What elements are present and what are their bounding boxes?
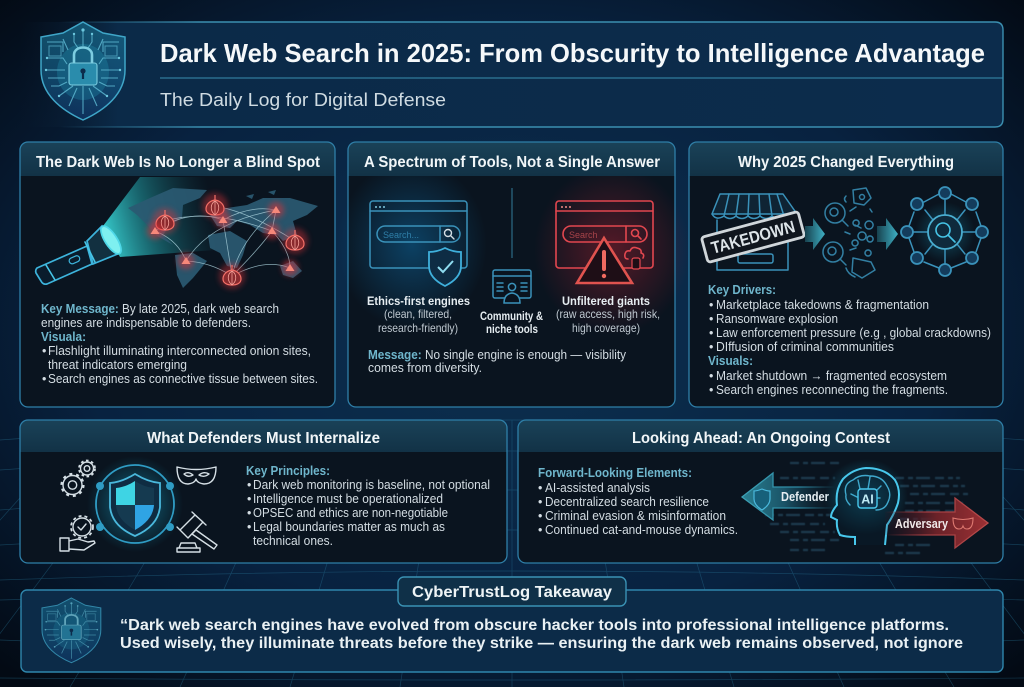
icon: hand with badge xyxy=(60,516,95,551)
heading: A Spectrum of Tools, Not a Single Answer xyxy=(364,154,660,171)
message text xyxy=(368,348,627,375)
icon: AI head xyxy=(824,459,908,545)
text: key message and visuals: Flashlight illuminating interconnected onion sites, xyxy=(48,344,311,358)
text: key drivers and visuals: • xyxy=(709,298,713,312)
heading: Why 2025 Changed Everything xyxy=(738,154,954,171)
text: key drivers and visuals xyxy=(708,283,991,397)
arrow: fragments to network xyxy=(877,218,898,250)
icon: ethics-first browser with shield xyxy=(370,201,467,286)
panel: Why 2025 Changed Everything xyxy=(689,142,1003,407)
text: key principles: • xyxy=(247,520,251,534)
text: forward-looking elements: Decentralized search resilience xyxy=(545,495,709,509)
decorative code rows xyxy=(765,463,968,553)
label: defender: Defender xyxy=(781,489,829,504)
icon: flashlight xyxy=(36,223,125,284)
panel: A Spectrum of Tools, Not a Single Answer xyxy=(337,142,690,407)
panel: What Defenders Must Internalize xyxy=(20,420,507,563)
text: key drivers and visuals: Search engines reconnecting the fragments. xyxy=(716,383,948,397)
icon: gears xyxy=(62,460,95,496)
panel: Looking Ahead: An Ongoing Contest xyxy=(518,420,1003,563)
icon: central split shield xyxy=(87,456,183,552)
heading: Looking Ahead: An Ongoing Contest xyxy=(632,430,891,447)
text: key message and visuals: Key Message: By late 2025, dark web search xyxy=(41,302,279,316)
icon: header shield with padlock xyxy=(41,22,125,120)
text: key drivers and visuals: • xyxy=(709,326,713,340)
text: forward-looking elements: • xyxy=(538,509,542,523)
text: key principles: Key Principles: xyxy=(246,464,330,478)
text: key drivers and visuals: DIffusion of criminal communities xyxy=(716,340,894,354)
text: key drivers and visuals: Visuals: xyxy=(708,354,753,368)
text: key principles xyxy=(246,464,490,548)
label: AI: AI xyxy=(861,492,874,506)
arrow: defender xyxy=(742,473,838,520)
text: key message and visuals: • xyxy=(42,372,46,386)
text: forward-looking elements: Criminal evasion & misinformation xyxy=(545,509,726,523)
text: forward-looking elements: • xyxy=(538,481,542,495)
text: forward-looking elements: AI-assisted analysis xyxy=(545,481,650,495)
icon: unfiltered browser with warning: Search xyxy=(569,230,598,240)
text: forward-looking elements: Forward-Looking Elements: xyxy=(538,466,692,480)
text: key principles: OPSEC and ethics are non-negotiable xyxy=(253,506,448,520)
quote: Used wisely, they illuminate threats before they strike — ensuring the dark web remains observed, not ignore xyxy=(120,635,963,652)
label: ethics-first engines xyxy=(367,294,470,335)
text: key drivers and visuals: • xyxy=(709,383,713,397)
text: key drivers and visuals: Law enforcement pressure (e.g , global crackdowns) xyxy=(716,326,991,340)
label: community and niche tools: Community & xyxy=(480,309,543,323)
icon: small shield xyxy=(754,489,770,510)
quote: “Dark web search engines have evolved from obscure hacker tools into professional intelligence platforms. xyxy=(120,617,949,634)
message text: Message: No single engine is enough — visibility xyxy=(368,348,627,362)
label: community and niche tools: niche tools xyxy=(486,322,538,336)
text: forward-looking elements: Continued cat-and-mouse dynamics. xyxy=(545,523,738,537)
label: unfiltered giants xyxy=(556,294,660,335)
text: forward-looking elements: • xyxy=(538,523,542,537)
arrow: adversary xyxy=(885,498,988,548)
heading: What Defenders Must Internalize xyxy=(147,430,380,447)
world map with onion sites xyxy=(128,188,318,289)
takeaway pill heading: CyberTrustLog Takeaway xyxy=(412,584,612,601)
text: key message and visuals xyxy=(41,302,318,386)
heading: The Dark Web Is No Longer a Blind Spot xyxy=(36,154,321,171)
text: key message and visuals: • xyxy=(42,344,46,358)
text: key drivers and visuals: • xyxy=(709,369,713,383)
icon: unfiltered browser with warning xyxy=(556,201,653,283)
text: key drivers and visuals: Ransomware explosion xyxy=(716,312,838,326)
icon: fragmented ecosystem xyxy=(823,188,875,278)
label: ethics-first engines: (clean, filtered, xyxy=(384,307,452,321)
icon: small mask xyxy=(953,518,973,529)
text: key principles: • xyxy=(247,478,251,492)
text: key message and visuals: Visuala: xyxy=(41,330,86,344)
quote xyxy=(120,617,963,652)
label: unfiltered giants: (raw access, high risk, xyxy=(556,307,660,321)
text: key principles: Legal boundaries matter as much as xyxy=(253,520,445,534)
text: key principles: • xyxy=(247,492,251,506)
label: adversary: Adversary xyxy=(895,516,949,531)
takeaway pill heading xyxy=(398,577,626,606)
flashlight beam xyxy=(103,177,215,257)
text: key principles: Dark web monitoring is baseline, not optional xyxy=(253,478,490,492)
text: key principles: Intelligence must be operationalized xyxy=(253,492,443,506)
text: key drivers and visuals: Market shutdown → fragmented ecosystem xyxy=(716,369,947,383)
text: key drivers and visuals: Key Drivers: xyxy=(708,283,776,297)
icon: faint shield xyxy=(42,598,101,663)
text: key message and visuals: engines are indispensable to defenders. xyxy=(41,316,251,330)
label: community and niche tools xyxy=(480,309,543,336)
text: key principles: technical ones. xyxy=(253,534,333,548)
header banner xyxy=(20,22,1003,127)
takeaway panel xyxy=(21,590,1003,672)
label: unfiltered giants: high coverage) xyxy=(572,321,640,335)
text: key drivers and visuals: • xyxy=(709,340,713,354)
icon: community browser xyxy=(493,270,531,303)
text: forward-looking elements xyxy=(538,466,738,537)
text: forward-looking elements: • xyxy=(538,495,542,509)
icon: gavel xyxy=(177,512,217,552)
text: key message and visuals: Search engines as connective tissue between sites. xyxy=(48,372,318,386)
label: ethics-first engines: research-friendly) xyxy=(378,321,458,335)
panel: The Dark Web Is No Longer a Blind Spot xyxy=(20,142,335,407)
text: key message and visuals: threat indicators emerging xyxy=(48,358,187,372)
title: Dark Web Search in 2025: From Obscurity to Intelligence Advantage xyxy=(160,38,985,68)
label: unfiltered giants: Unfiltered giants xyxy=(562,294,650,308)
text: key drivers and visuals: Marketplace takedowns & fragmentation xyxy=(716,298,929,312)
message text: comes from diversity. xyxy=(368,361,482,375)
icon: storefront with takedown stamp xyxy=(701,194,805,270)
icon: reconnected search network xyxy=(901,187,988,276)
arrow: takedown to fragments xyxy=(805,218,825,250)
icon: mask xyxy=(177,467,216,484)
stamp label: TAKEDOWN xyxy=(709,217,797,258)
text: key principles: • xyxy=(247,506,251,520)
text: key drivers and visuals: • xyxy=(709,312,713,326)
subtitle: The Daily Log for Digital Defense xyxy=(160,90,446,110)
label: ethics-first engines: Ethics-first engines xyxy=(367,294,470,308)
icon: ethics-first browser with shield: Search... xyxy=(383,230,419,240)
